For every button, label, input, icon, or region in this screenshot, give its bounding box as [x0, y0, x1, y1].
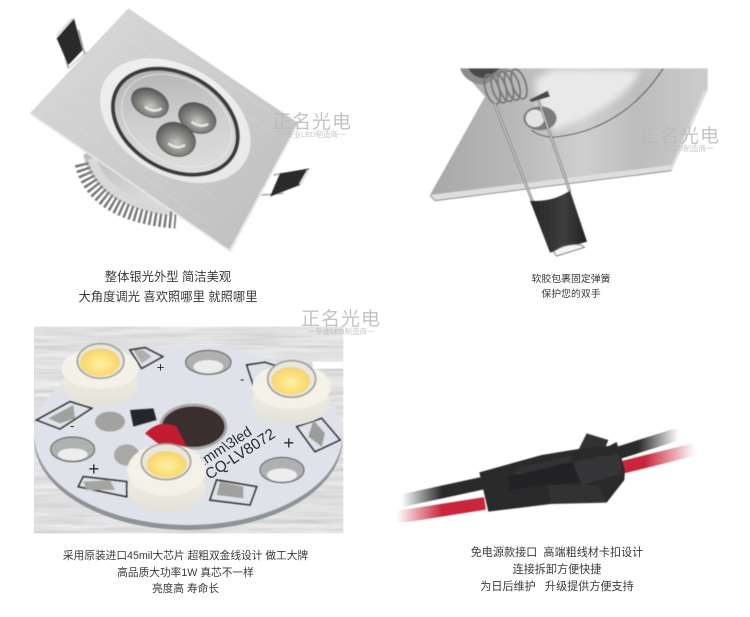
caption: connector: 为日后维护 升级提供方便支持 — [480, 579, 634, 593]
caption: LED chip: 亮度高 寿命长 — [152, 582, 219, 595]
mounting screw — [523, 106, 557, 130]
board markings: - — [70, 418, 74, 433]
watermark: 正名光电 — [640, 125, 720, 147]
coil spring — [481, 67, 550, 106]
panel: spring clip detail — [430, 67, 720, 300]
caption: spring clip: 软胶包裹固定弹簧 — [531, 272, 611, 285]
curved lamp body highlight — [460, 68, 663, 137]
board markings: 2mm\3led — [193, 424, 255, 472]
watermark: 正名光电 — [301, 308, 381, 330]
illustration: spring clip photo — [430, 67, 708, 256]
caption: lamp appearance: 大角度调光 喜欢照哪里 就照哪里 — [78, 289, 258, 304]
LED emitter: top right — [252, 361, 331, 425]
watermark: 一专业LED制造商一 — [278, 129, 346, 139]
soldered wires — [130, 408, 187, 447]
panel: power connector photo — [397, 433, 695, 593]
spring clip: bottom right — [262, 168, 309, 197]
caption: connector: 免电源款接口 高端粗线材卡扣设计 — [471, 545, 643, 559]
caption: LED chip — [63, 549, 308, 595]
round aluminium board — [34, 345, 342, 530]
LED emitter: top left — [62, 344, 138, 407]
watermark: 正名光电 — [272, 111, 352, 133]
wire arms — [494, 100, 570, 203]
illustration: LED circuit board — [34, 327, 343, 533]
caption: LED chip: 高品质大功率1W 真芯不一样 — [117, 566, 254, 579]
board markings: - — [240, 371, 244, 386]
rear of plate — [430, 68, 708, 201]
solder pads — [37, 348, 340, 505]
LED emitter: front — [127, 444, 206, 513]
mounting holes — [51, 350, 304, 483]
three LED lenses — [127, 82, 221, 163]
red wire — [397, 449, 695, 517]
watermark: 一专业LED制造商一 — [646, 143, 714, 153]
spring clip: top left — [57, 18, 87, 68]
centre hole — [161, 405, 226, 448]
panel: silver square downlight — [29, 8, 352, 304]
board markings: + — [157, 360, 165, 375]
watermark: 一专业LED制造商一 — [307, 326, 375, 336]
brushed metal background — [34, 327, 343, 533]
caption: lamp appearance — [78, 269, 258, 304]
caption: spring clip — [531, 272, 611, 300]
panel: LED board photo — [34, 308, 381, 595]
connector housing — [479, 433, 625, 512]
black wire — [402, 434, 678, 501]
caption: LED chip: 采用原装进口45mil大芯片 超粗双金线设计 做工大牌 — [63, 549, 308, 562]
caption: lamp appearance: 整体银光外型 简洁美观 — [105, 269, 231, 284]
black rubber sleeve — [530, 191, 587, 256]
board markings: + — [88, 458, 99, 479]
board markings: CQ-LV8072 — [202, 426, 278, 483]
light fitting ring with dark bezel — [78, 33, 273, 209]
square aluminium plate — [29, 8, 298, 252]
caption: connector — [471, 545, 643, 593]
illustration: lamp photo — [29, 8, 309, 252]
caption: connector: 连接拆卸方便快捷 — [513, 562, 601, 576]
caption: spring clip: 保护您的双手 — [541, 287, 601, 300]
board markings: + — [283, 432, 294, 453]
board markings — [70, 360, 294, 483]
heat sink fins — [83, 143, 207, 220]
illustration: connector and wires — [397, 433, 695, 517]
